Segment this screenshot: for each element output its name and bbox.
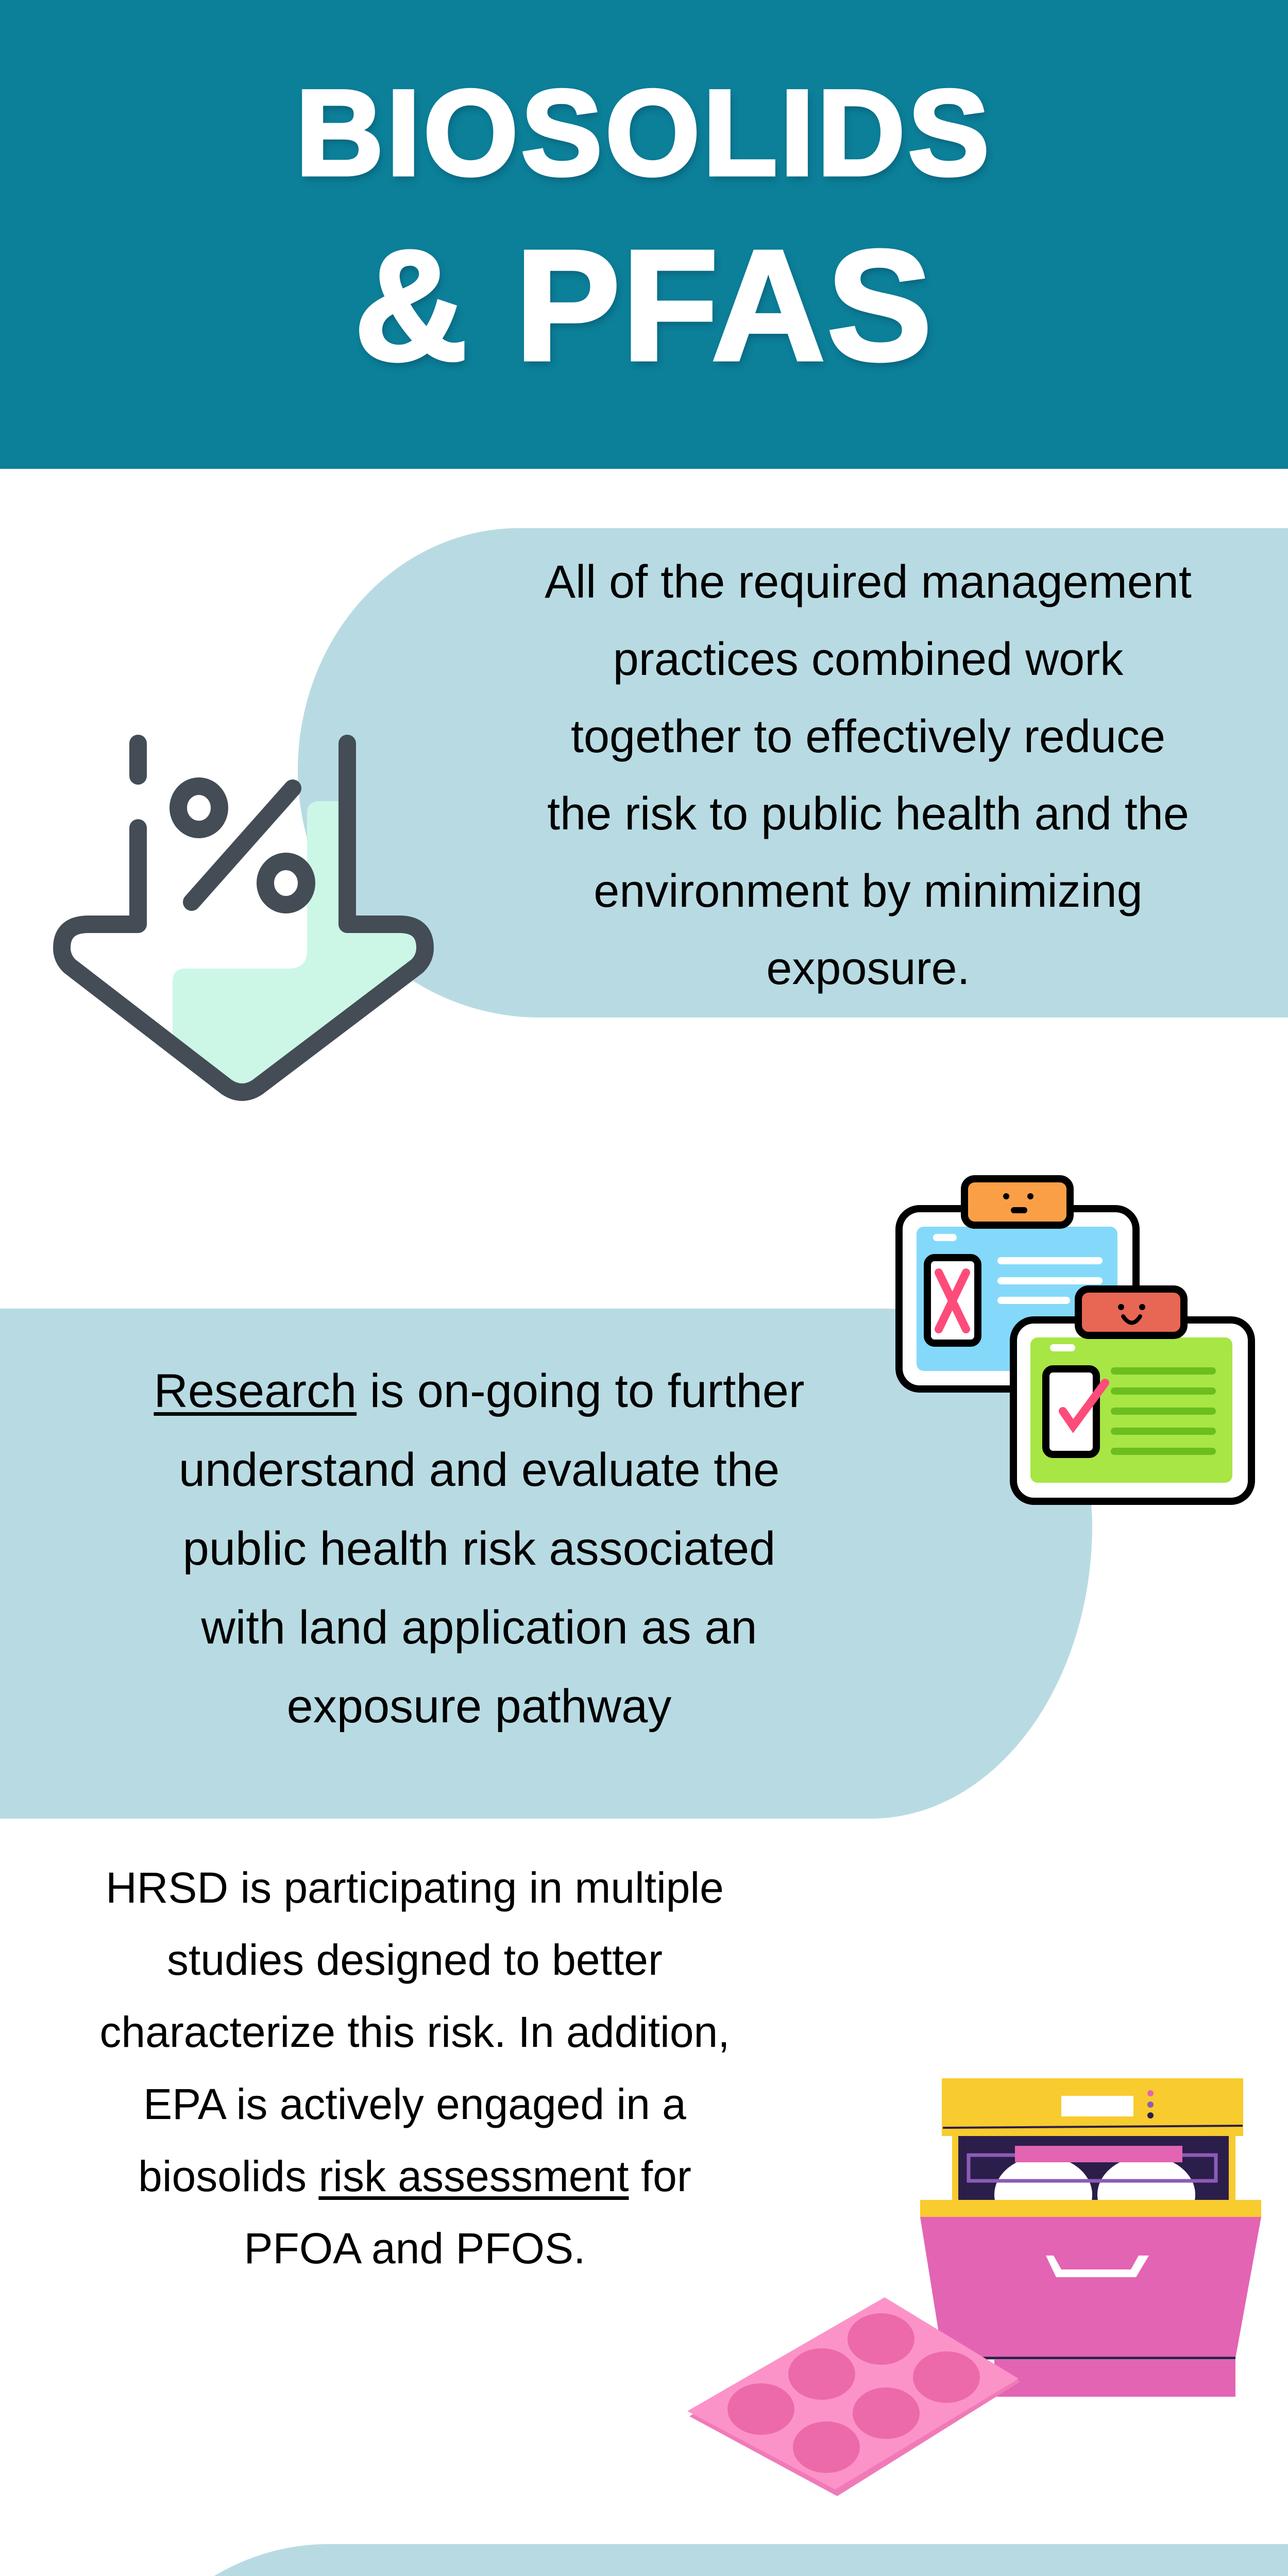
text: HRSD studies: studies designed to better (167, 1936, 663, 1984)
title line 2: & PFAS (354, 217, 934, 393)
text: management practices (545, 556, 1192, 994)
text: research (154, 1365, 805, 1733)
text: HRSD studies: characterize this risk. In addition, (99, 2008, 730, 2056)
text: research: understand and evaluate the (179, 1444, 779, 1496)
text: management practices: environment by minimizing (594, 866, 1143, 917)
text: HRSD studies: EPA is actively engaged in a (143, 2080, 686, 2128)
text: management practices: exposure. (766, 943, 970, 994)
panel: minimize exposure (87, 2544, 1288, 2576)
header banner (0, 0, 1288, 469)
icon: percent down arrow (53, 735, 434, 1101)
dishwasher (920, 2078, 1261, 2397)
muffin tray (687, 2297, 1020, 2496)
text: research: public health risk associated (183, 1522, 775, 1575)
title line 1: BIOSOLIDS (296, 65, 992, 201)
text: management practices: the risk to public health and the (547, 788, 1189, 840)
panel: research (0, 1309, 1092, 1819)
text: research: with land application as an (201, 1601, 757, 1654)
text: HRSD studies: PFOA and PFOS. (244, 2224, 585, 2273)
text: HRSD studies (99, 1863, 730, 2273)
text: management practices: All of the required management (545, 556, 1192, 608)
text: management practices: practices combined work (613, 634, 1123, 685)
icon: clipboards (895, 1175, 1255, 1505)
text: research: exposure pathway (287, 1680, 671, 1733)
text: HRSD studies: biosolids risk assessment for (138, 2152, 691, 2200)
panel: management practices (298, 528, 1288, 1018)
text: research: Research is on-going to further (154, 1365, 805, 1417)
text: management practices: together to effectively reduce (571, 711, 1165, 762)
icon: dishwasher and muffin tray (687, 2078, 1261, 2496)
text: HRSD studies: HRSD is participating in multiple (106, 1863, 724, 1912)
